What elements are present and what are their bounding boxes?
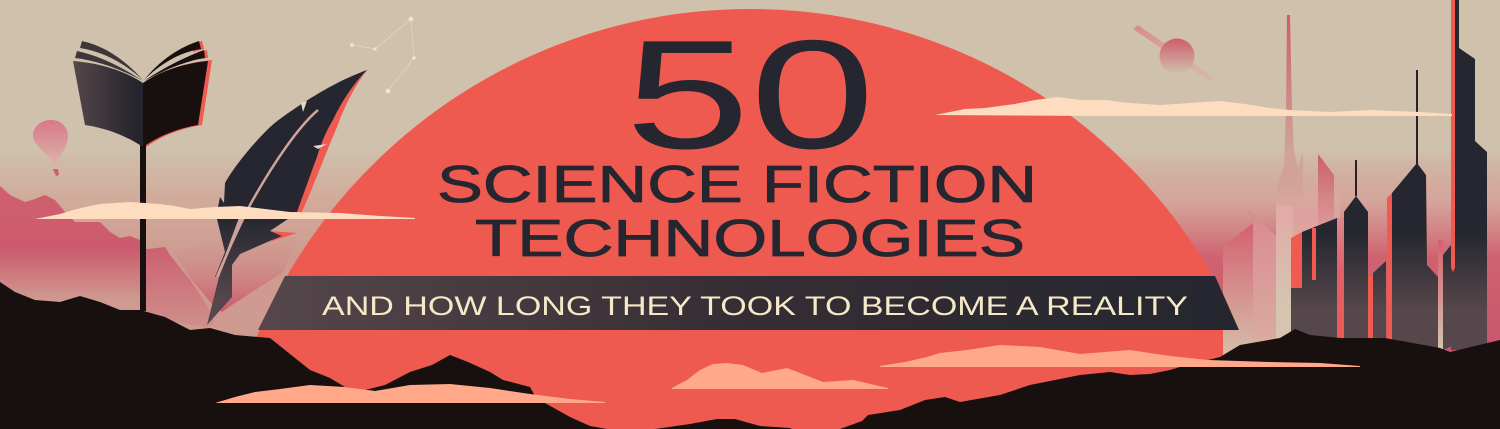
left pages [75,41,143,81]
left upper cloud [35,202,415,219]
left cover [73,61,143,147]
constellation [350,17,416,93]
right cover [143,61,208,147]
right pages [144,41,205,81]
right upper cloud [935,97,1452,116]
red lower barb [268,231,297,241]
banner [258,276,1239,330]
distant faded city [1223,15,1340,365]
red sun dome [228,9,1272,429]
quill feather [207,69,368,325]
building: tallest tower [1443,0,1487,350]
planet [1133,25,1214,82]
hot air balloon [33,120,68,176]
feather spine [217,110,318,277]
building: narrow tower with antenna [1344,160,1373,345]
skyline [1291,0,1487,350]
subtitle: AND HOW LONG THEY TOOK TO BECOME A REALITY [322,291,1188,321]
book on a post [73,41,212,311]
lower left barbs [215,215,240,277]
building: slanted roof block [1291,218,1344,345]
dark foreground ridge [0,282,1500,429]
red shadow of right side [146,41,212,147]
title line two: TECHNOLOGIES [475,210,1025,268]
right sky glow [1100,150,1500,365]
peach cloud bottom centre [672,363,888,389]
feather nicks [301,101,307,112]
peach cloud bottom left [215,384,605,403]
red vane edge [295,69,368,214]
title line one: SCIENCE FICTION [437,156,1037,214]
upper vane [217,70,367,212]
building: wide tower with antenna [1373,70,1443,350]
distant pink mountains [0,186,300,328]
peach cloud bottom right [880,345,1360,367]
lower right barbs and shaft [207,215,294,325]
title number: 50 [625,8,875,181]
